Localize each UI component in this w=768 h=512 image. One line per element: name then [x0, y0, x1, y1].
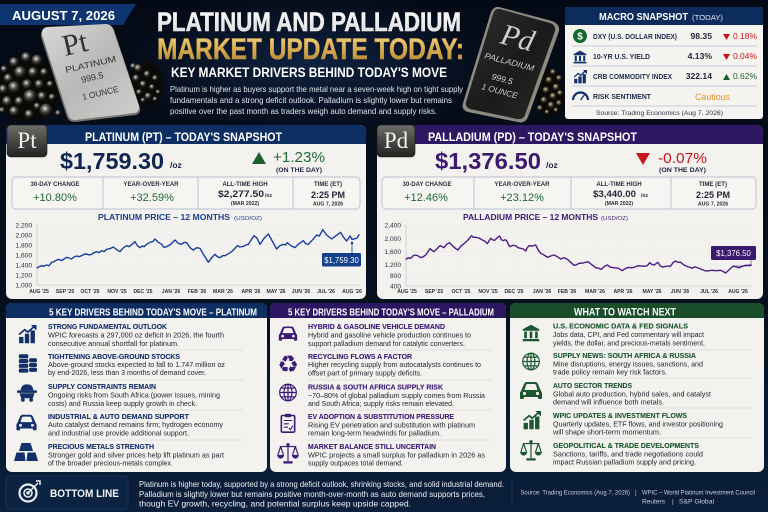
watch: economic data: Jobs data, CPI, and Fed commentary will impact [553, 330, 704, 339]
platinum stats row: AUG 7, 2026 [313, 202, 343, 208]
driver: russia and south africa supply risk: RUSSIA & SOUTH AFRICA SUPPLY RISK [308, 382, 444, 392]
platinum line chart: AUG '25 [29, 289, 49, 295]
palladium bar and nuggets illustration [463, 7, 564, 122]
palladium line chart: 800 [390, 273, 401, 280]
driver: hybrid and gasoline demand: HYBRID & GASOLINE VEHICLE DEMAND [308, 322, 446, 331]
driver: russia and south africa supply risk [280, 382, 485, 408]
panel: platinum snapshot [6, 125, 366, 299]
panel: palladium key drivers [270, 303, 506, 472]
platinum line chart: 2,000 [15, 232, 32, 240]
watch: supply news: Mine disruptions, energy issues, sanctions, and [553, 360, 703, 368]
driver: precious metals strength: PRECIOUS METALS STRENGTH [48, 442, 154, 451]
platinum stats row: 30-DAY CHANGE [30, 181, 80, 188]
driver: recycling flows: ♻ [277, 350, 299, 378]
row: DXY: 0.18% [733, 32, 757, 41]
intro paragraph: positive over the past month as traders weigh auto demand and supply risks. [170, 106, 437, 116]
date ribbon [0, 4, 136, 25]
palladium badge: Pd [384, 128, 409, 153]
palladium stats row: 2:25 PM [696, 190, 730, 200]
watch: geopolitical developments [520, 440, 703, 466]
driver: above-ground stocks: by end-2026, less than 3 months of demand cover. [48, 368, 206, 377]
source credits: Reuters [642, 498, 665, 506]
source credits: WPIC – World Platinum Investment Council [642, 490, 755, 496]
bottom line summary: though EV growth, recycling, and potential surplus keep upside capped. [139, 498, 411, 508]
row: DXY: 98.35 [690, 31, 712, 41]
source credits: S&P Global [679, 498, 714, 506]
platinum line chart: 2,200 [15, 222, 32, 230]
palladium stats row: /oz [641, 193, 648, 199]
palladium chart title: (USD/OZ) [601, 216, 628, 222]
main title [157, 7, 464, 66]
driver: russia and south africa supply risk: ~70–80% of global palladium supply comes from Russia [308, 391, 485, 400]
platinum price callout: $1,759.30 [324, 256, 360, 265]
palladium badge [377, 125, 415, 157]
driver: recycling flows: Higher recycling supply from autocatalysts continues to [308, 360, 481, 369]
source credits [512, 482, 755, 506]
macro snapshot heading: MACRO SNAPSHOT [599, 12, 688, 23]
platinum nuggets and bar illustration [0, 24, 164, 122]
palladium stats row: $3,440.00 [593, 189, 636, 199]
row: DXY: $ [577, 32, 583, 42]
palladium bar and nuggets illustration: 999.5 [490, 71, 514, 87]
bottom line summary: Palladium is slightly lower but remains positive month-over-month as auto demand supports prices, [139, 489, 485, 499]
watch: wpic and investment flows: Quarterly updates, ETF flows, and investor positioning [553, 420, 723, 428]
platinum chart title: PLATINUM PRICE – 12 MONTHS [98, 212, 230, 222]
driver: supply constraints: costs) and Russia keep supply growth in check. [48, 399, 197, 408]
driver: precious metals strength [14, 442, 224, 468]
intro paragraph: Platinum is higher as buyers support the metal near a seven-week high on tight supply [170, 84, 464, 94]
palladium price callout: $1,376.50 [716, 249, 752, 258]
palladium line chart: NOV '25 [478, 289, 498, 295]
bottom line summary: Platinum is higher today, supported by a strong deficit outlook, shrinking stocks, and solid industrial demand. [139, 479, 504, 489]
palladium line chart: SEP '25 [425, 289, 443, 295]
palladium line chart: JUL '26 [700, 289, 718, 295]
row: 10-year yield: 0.04% [733, 52, 757, 61]
driver: precious metals strength: Stronger gold and silver prices help lift platinum as part [48, 450, 224, 460]
row: CRB commodity index [574, 70, 757, 83]
driver: ev adoption and substitution: remain long-term headwinds for palladium. [308, 428, 441, 438]
row: CRB commodity index: 0.62% [733, 72, 757, 81]
watch: wpic and investment flows: WPIC UPDATES & INVESTMENT FLOWS [553, 411, 687, 420]
watch: supply news: SUPPLY NEWS: SOUTH AFRICA & RUSSIA [553, 351, 697, 360]
watch: wpic and investment flows [524, 411, 723, 436]
palladium bar and nuggets illustration: Pd [496, 18, 539, 59]
watch: auto sector [520, 381, 711, 406]
platinum stats row: ALL-TIME HIGH [222, 181, 268, 188]
palladium line chart: APR '26 [613, 289, 633, 295]
palladium line chart: JAN '26 [533, 289, 551, 295]
palladium stats row [382, 177, 756, 209]
palladium line chart: JUN '26 [671, 289, 689, 295]
platinum line chart: 1,600 [15, 252, 32, 260]
driver: above-ground stocks: TIGHTENING ABOVE-GROUND STOCKS [48, 352, 180, 361]
platinum line chart: NOV '25 [107, 289, 127, 295]
driver: market balance: supply outpaces total demand. [308, 458, 403, 468]
driver: recycling flows: offset part of primary supply deficits. [308, 368, 422, 378]
icon: target [20, 481, 40, 502]
watch: economic data [523, 322, 705, 348]
row: risk sentiment [573, 92, 730, 102]
platinum line chart: 1,800 [15, 242, 32, 250]
platinum badge [7, 125, 47, 157]
platinum daily change: +1.23% [273, 149, 325, 166]
palladium line chart: AUG '26 [728, 289, 748, 295]
driver: above-ground stocks [19, 352, 225, 377]
source credits: Source: Trading Economics (Aug 7, 2026) [520, 490, 630, 496]
palladium line chart: MAR '26 [585, 289, 605, 295]
platinum stats row: +10.80% [33, 192, 77, 204]
driver: ev adoption and substitution: Rising EV penetration and substitution with platinum [308, 420, 475, 430]
platinum badge: Pt [17, 128, 37, 153]
palladium stats row: 30-DAY CHANGE [402, 181, 452, 188]
driver: industrial and auto demand: Auto catalyst demand remains firm; hydrogen economy [48, 420, 223, 429]
platinum line chart: 1,200 [15, 272, 32, 280]
row: risk sentiment: Cautious [695, 92, 730, 102]
palladium daily change: -0.07% [658, 150, 707, 167]
watch: geopolitical developments: Sanctions, tariffs, and trade negotiations could [553, 450, 703, 458]
platinum line chart: MAY '26 [266, 289, 286, 295]
driver: strong fundamental outlook: STRONG FUNDAMENTAL OUTLOOK [48, 322, 168, 331]
platinum snapshot heading: PLATINUM (PT) – TODAY'S SNAPSHOT [85, 132, 282, 144]
driver: russia and south africa supply risk: and South Africa; supply risks remain elevated. [308, 399, 454, 408]
driver: supply constraints: SUPPLY CONSTRAINTS REMAIN [48, 382, 156, 391]
palladium bar and nuggets illustration: PALLADIUM [483, 51, 535, 73]
platinum stats row: TIME (ET) [314, 181, 342, 188]
row: 10-year yield [574, 51, 757, 63]
row: DXY: DXY (U.S. DOLLAR INDEX) [593, 34, 677, 41]
watch: auto sector: Global auto production, hybrid sales, and catalyst [553, 390, 711, 398]
palladium price: /oz [546, 160, 558, 170]
platinum daily change: (ON THE DAY) [276, 167, 322, 174]
palladium line chart: MAY '26 [642, 289, 662, 295]
driver: market balance: MARKET BALANCE STILL UNCERTAIN [308, 442, 436, 451]
palladium line chart: OCT '25 [451, 289, 471, 295]
driver: ev adoption and substitution [281, 412, 475, 438]
palladium line chart: FEB '26 [558, 289, 576, 295]
bottom line label with target icon: BOTTOM LINE [50, 488, 119, 500]
driver: supply constraints [17, 382, 220, 408]
platinum line chart: DEC '25 [133, 289, 153, 295]
platinum drivers heading: 5 KEY DRIVERS BEHIND TODAY'S MOVE – PLATINUM [49, 308, 257, 318]
intro paragraph: fundamentals and a strong deficit outlook. Palladium is slightly lower but remains [170, 95, 452, 105]
platinum stats row: 2:25 PM [311, 190, 345, 200]
platinum nuggets and bar illustration: PLATINUM [64, 54, 117, 75]
palladium drivers heading: 5 KEY DRIVERS BEHIND TODAY'S MOVE – PALLADIUM [288, 308, 494, 318]
palladium chart title: PALLADIUM PRICE – 12 MONTHS [463, 212, 598, 222]
row: CRB commodity index: CRB COMMODITY INDEX [593, 74, 672, 81]
platinum stats row: $2,277.50 [218, 189, 264, 199]
driver: industrial and auto demand [16, 412, 223, 438]
palladium snapshot heading: PALLADIUM (PD) – TODAY'S SNAPSHOT [428, 132, 637, 144]
palladium price callout [711, 246, 756, 266]
source credits: | [635, 490, 637, 496]
driver: supply constraints: Ongoing risks from South Africa (power issues, mining [48, 390, 220, 400]
watch: supply news: trade policy remain key risk factors. [553, 368, 667, 376]
watch: auto sector: demand will influence both metals. [553, 398, 664, 406]
driver: industrial and auto demand: INDUSTRIAL & AUTO DEMAND SUPPORT [48, 412, 189, 421]
driver: hybrid and gasoline demand: support palladium demand for catalytic converters. [308, 339, 465, 348]
driver: industrial and auto demand: and industrial use provide additional support. [48, 428, 189, 438]
platinum stats row: (MAR 2022) [231, 201, 259, 207]
driver: market balance: WPIC projects a small surplus for palladium in 2026 as [308, 450, 485, 460]
row: risk sentiment: RISK SENTIMENT [593, 94, 652, 101]
platinum stats row: /oz [265, 193, 272, 199]
platinum price: /oz [170, 160, 182, 170]
panel: palladium snapshot [377, 125, 763, 299]
palladium line chart: 2,000 [384, 236, 401, 243]
palladium line chart: 400 [390, 284, 401, 290]
palladium line chart [384, 222, 756, 295]
palladium stats row: +12.46% [404, 192, 448, 204]
bottom line label with target icon [6, 476, 128, 509]
platinum nuggets and bar illustration: Pt [59, 25, 92, 63]
watch: economic data: U.S. ECONOMIC DATA & FED SIGNALS [553, 322, 688, 330]
platinum line chart: MAR '26 [213, 289, 233, 295]
platinum stats row: YEAR-OVER-YEAR [123, 181, 179, 188]
subtitle: KEY MARKET DRIVERS BEHIND TODAY'S MOVE [171, 65, 447, 80]
driver: precious metals strength: of the broader precious-metals complex. [48, 458, 173, 468]
watch: auto sector: AUTO SECTOR TRENDS [553, 381, 632, 390]
macro source note: Source: Trading Economics (Aug 7, 2026) [596, 110, 723, 117]
platinum line chart: 1,000 [15, 282, 32, 290]
platinum price: $1,759.30 [60, 148, 164, 174]
driver: ev adoption and substitution: EV ADOPTION & SUBSTITUTION PRESSURE [308, 412, 454, 421]
platinum daily change [252, 149, 325, 174]
watch: geopolitical developments: GEOPOLITICAL & TRADE DEVELOPMENTS [553, 441, 699, 450]
platinum price callout [322, 242, 361, 266]
watch: wpic and investment flows: will shape short-term momentum. [552, 428, 661, 436]
platinum line chart: APR '26 [241, 289, 261, 295]
platinum chart title: (USD/OZ) [234, 216, 262, 222]
source credits: | [672, 498, 674, 506]
row: 10-year yield: 4.13% [688, 51, 712, 61]
main title: MARKET UPDATE TODAY: [157, 33, 464, 66]
platinum stats row: +32.59% [130, 192, 174, 204]
watch: economic data: yields, the dollar, and precious-metals sentiment. [553, 338, 705, 348]
palladium daily change: (ON THE DAY) [659, 167, 706, 174]
palladium line chart: DEC '25 [504, 289, 524, 295]
panel: what to watch next [510, 303, 764, 472]
driver: market balance [277, 442, 485, 468]
palladium line chart: AUG '25 [397, 289, 417, 295]
palladium stats row: (MAR 2022) [605, 201, 633, 207]
driver: hybrid and gasoline demand [279, 322, 471, 348]
palladium stats row: AUG 7, 2026 [698, 202, 728, 208]
watch next heading: WHAT TO WATCH NEXT [574, 306, 676, 318]
panel: macro snapshot [565, 7, 763, 119]
row: DXY [573, 29, 757, 43]
platinum line chart: JUL '26 [317, 289, 335, 295]
platinum line chart: 1,400 [15, 262, 32, 270]
panel: platinum key drivers [6, 303, 267, 472]
macro snapshot heading: (TODAY) [692, 13, 723, 22]
palladium line chart: 2,400 [384, 222, 401, 230]
palladium stats row: YEAR-OVER-YEAR [494, 181, 550, 188]
palladium stats row: TIME (ET) [699, 181, 727, 188]
palladium line chart: 1,200 [384, 262, 401, 269]
platinum stats row [12, 177, 360, 209]
watch: geopolitical developments: impact Russian palladium supply and pricing. [553, 458, 696, 466]
row: 10-year yield: 10-YR U.S. YIELD [593, 54, 650, 61]
driver: recycling flows: RECYCLING FLOWS A FACTOR [308, 352, 413, 361]
palladium stats row: +23.12% [500, 192, 544, 204]
palladium line chart: 1,600 [384, 249, 401, 256]
platinum line chart: JUN '26 [292, 289, 310, 295]
platinum nuggets and bar illustration: 1 OUNCE [81, 84, 120, 102]
platinum line chart: AUG '26 [342, 289, 362, 295]
driver: strong fundamental outlook: consecutive annual shortfall for platinum. [48, 339, 179, 348]
palladium stats row: ALL-TIME HIGH [596, 181, 642, 188]
watch: supply news [523, 351, 703, 376]
platinum line chart: OCT '25 [80, 289, 100, 295]
bottom line summary [139, 479, 504, 508]
main title: PLATINUM AND PALLADIUM [157, 7, 461, 37]
palladium daily change [636, 150, 707, 174]
row: CRB commodity index: 322.14 [686, 71, 712, 81]
platinum line chart: FEB '26 [188, 289, 206, 295]
driver: strong fundamental outlook: WPIC forecasts a 297,000 oz deficit in 2026, the fourth [48, 330, 224, 340]
date ribbon: AUGUST 7, 2026 [12, 8, 115, 23]
platinum line chart [15, 222, 362, 295]
platinum nuggets and bar illustration: 999.5 [80, 70, 104, 85]
platinum line chart: JAN '26 [162, 289, 180, 295]
palladium bar and nuggets illustration: 1 OUNCE [480, 82, 519, 101]
driver: recycling flows [277, 350, 481, 378]
intro paragraph [170, 84, 464, 116]
palladium price: $1,376.50 [435, 148, 541, 174]
driver: above-ground stocks: Above-ground stocks expected to fall to 1.747 million oz [48, 360, 225, 369]
platinum line chart: SEP '25 [56, 289, 74, 295]
driver: strong fundamental outlook [19, 322, 224, 348]
driver: hybrid and gasoline demand: Hybrid and gasoline vehicle production continues to [308, 330, 471, 340]
